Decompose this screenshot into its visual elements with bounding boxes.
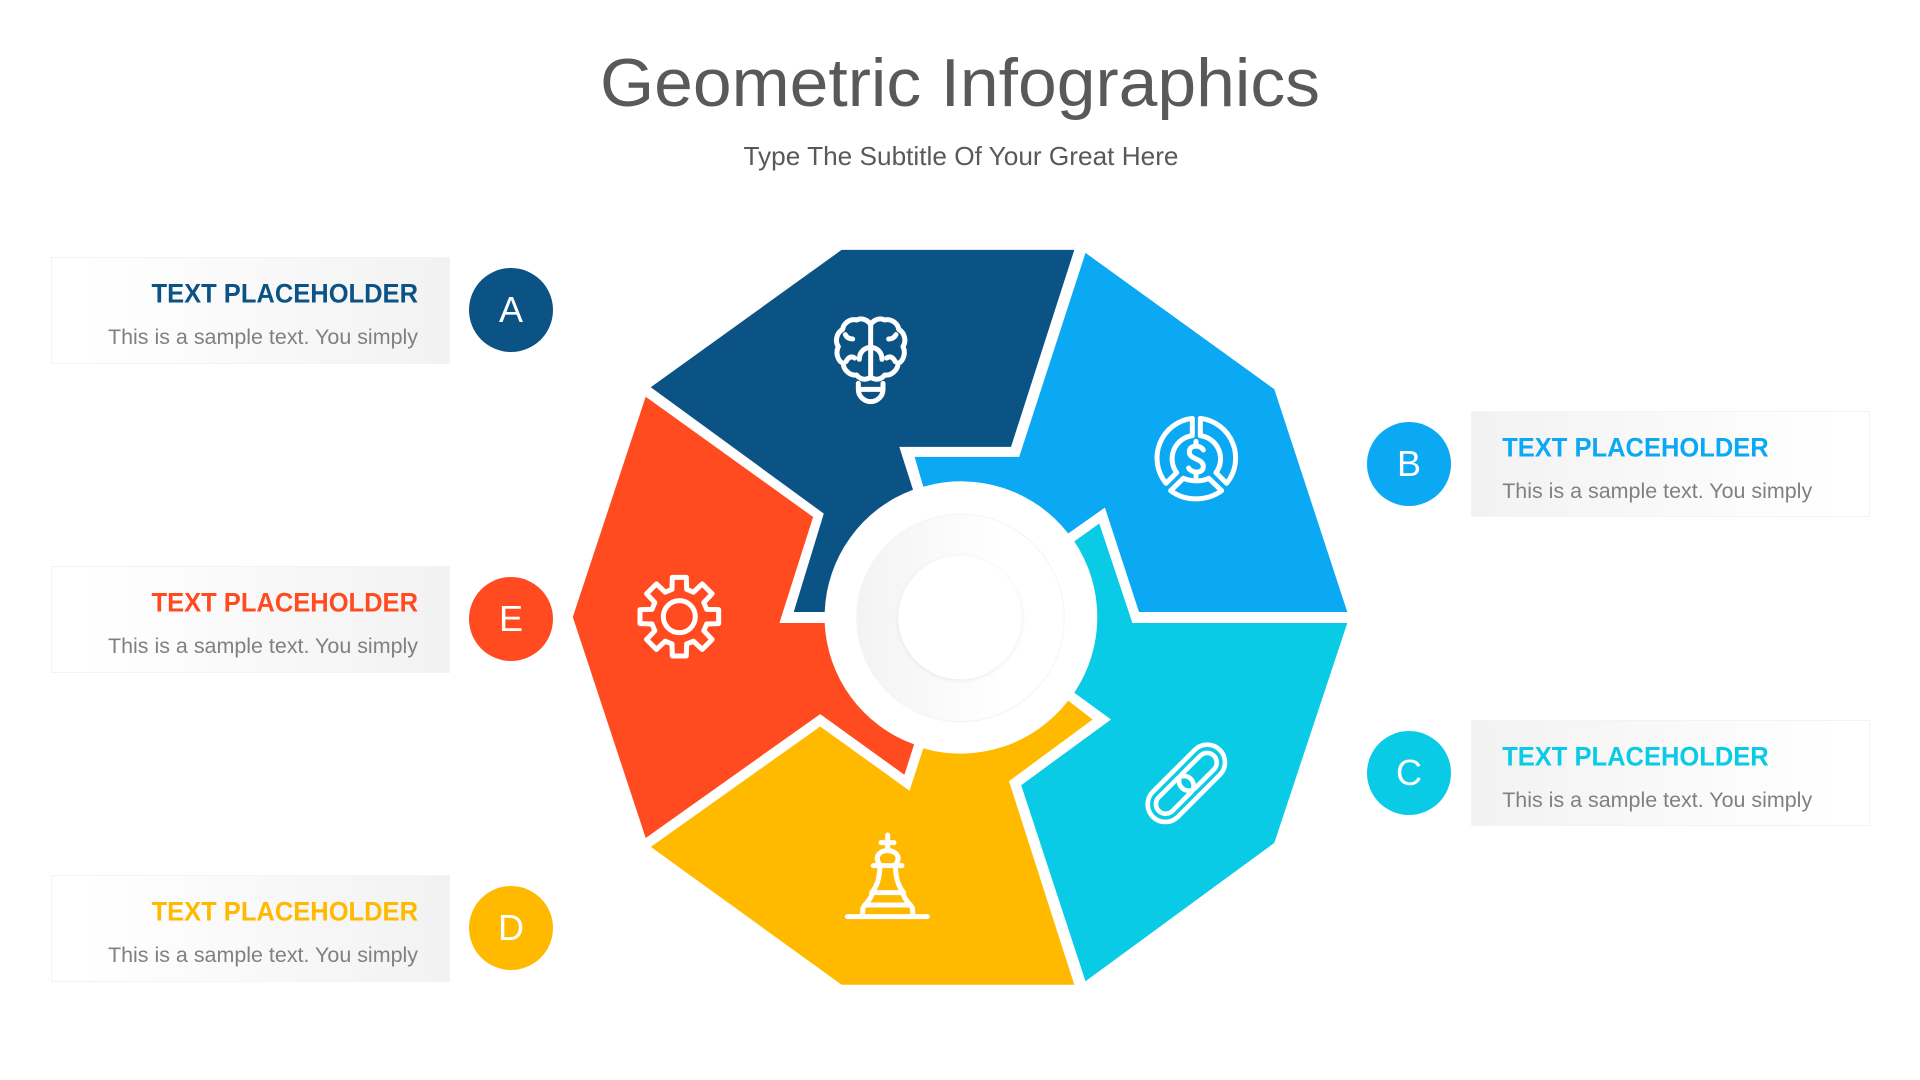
heading A: TEXT PLACEHOLDER (152, 279, 418, 309)
icon: gear (640, 577, 719, 656)
badge E: E (499, 598, 523, 639)
body C: This is a sample text. You simply (1502, 788, 1812, 812)
icon: chess king (847, 835, 927, 917)
heading C: TEXT PLACEHOLDER (1502, 742, 1769, 772)
heading D: TEXT PLACEHOLDER (152, 897, 418, 927)
segment B: blue (915, 253, 1347, 612)
badge A: A (499, 289, 523, 330)
panel: card A (52, 258, 450, 364)
body E: This is a sample text. You simply (108, 634, 418, 658)
body A: This is a sample text. You simply (108, 325, 418, 349)
segment D: amber (651, 701, 1093, 985)
panel: card D (52, 876, 450, 982)
badge C: C (1396, 752, 1422, 793)
center mid ring (857, 514, 1064, 722)
subtitle: Type The Subtitle Of Your Great Here (744, 143, 1178, 171)
icon: dollar chart (1157, 418, 1236, 499)
heading B: TEXT PLACEHOLDER (1502, 432, 1769, 462)
center inner circle (898, 556, 1022, 679)
body B: This is a sample text. You simply (1502, 479, 1812, 503)
badge D: D (498, 907, 524, 948)
segment C: cyan (1021, 524, 1347, 981)
panel: card E (52, 566, 450, 672)
badge A (469, 268, 553, 352)
panel: card B (1472, 412, 1870, 516)
panel: card C (1472, 720, 1870, 826)
body D: This is a sample text. You simply (108, 943, 418, 967)
badge B: B (1397, 443, 1421, 484)
badge E (469, 577, 553, 661)
segment A: navy (651, 250, 1074, 612)
icon: chain link (1140, 737, 1232, 829)
badge C (1367, 731, 1451, 815)
badge D (469, 886, 553, 970)
heading E: TEXT PLACEHOLDER (152, 588, 418, 618)
badge B (1367, 422, 1451, 506)
panel: decagon diagram (573, 250, 1347, 985)
segment E: orange (573, 397, 914, 838)
icon: brain bulb (836, 319, 905, 402)
title: Geometric Infographics (600, 45, 1320, 121)
